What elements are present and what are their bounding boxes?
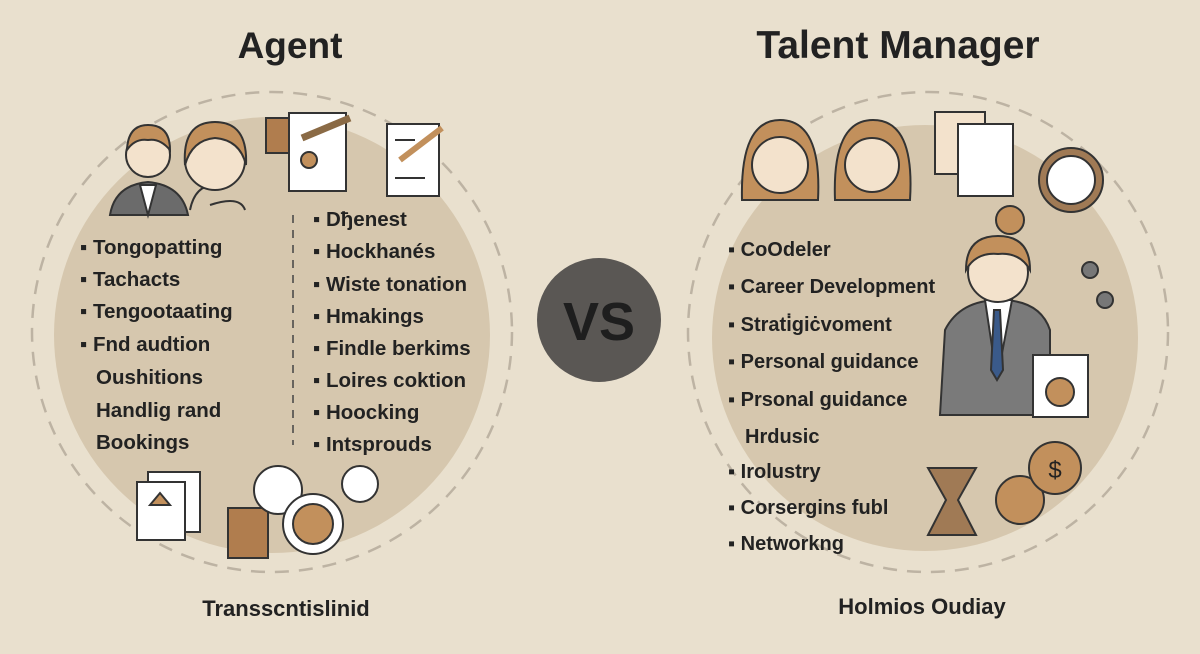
list: talent manager: ▪ Irolustry [728, 461, 822, 483]
title: Agent: Agent [238, 25, 342, 66]
list: talent manager: ▪ Strati̇giċvoment [728, 312, 892, 336]
badge: VS [537, 258, 661, 382]
list: agent right: ▪ Hockhanés [313, 240, 435, 263]
icon: document with pen [266, 113, 350, 191]
list: agent left: Bookings [96, 431, 189, 454]
list: talent manager: ▪ CoOdeler [728, 239, 831, 261]
list: agent right [313, 208, 471, 456]
list: talent manager: ▪ Networkng [728, 533, 844, 555]
list: agent right: ▪ Hmakings [313, 305, 424, 328]
list: talent manager: ▪ Personal guidance [728, 351, 918, 373]
panel: agent circle [32, 92, 512, 572]
icon: hourglass and gears: $ [1048, 457, 1062, 484]
icon: documents and clock [935, 112, 1103, 234]
list: agent left [80, 236, 233, 454]
list: agent left: ▪ Fnd audtion [80, 333, 210, 356]
list: agent right: ▪ Findle berkims [313, 337, 471, 360]
icon: agent people [110, 122, 246, 215]
panel: talent manager circle [688, 92, 1168, 572]
icon: two women [742, 120, 911, 200]
list: agent right: ▪ Wiste tonation [313, 273, 467, 296]
divider [292, 215, 294, 445]
icon: hourglass and gears [928, 442, 1081, 535]
list: agent left: ▪ Tongopatting [80, 236, 222, 259]
list: agent left: ▪ Tachacts [80, 268, 180, 291]
list: talent manager: ▪ Career Development [728, 276, 936, 298]
list: agent left: ▪ Tengootaating [80, 300, 233, 323]
icon: businessman [940, 236, 1113, 417]
list: agent right: ▪ Loires coktion [313, 369, 466, 392]
list: agent left: Oushitions [96, 366, 203, 389]
title: Talent Manager: Talent Manager [756, 24, 1040, 67]
list: talent manager: ▪ Corsergins fubl [728, 497, 888, 519]
label: talent manager bottom: Holmios Oudiay [838, 594, 1006, 619]
list: agent right: ▪ Hoocking [313, 401, 419, 424]
icon: agent bottom documents [137, 466, 378, 558]
list: agent left: Handlig rand [96, 399, 221, 422]
icon: contract [387, 124, 442, 196]
list: talent manager [728, 239, 936, 555]
list: agent right: ▪ Dђenest [313, 208, 407, 231]
list: agent right: ▪ Intsprouds [313, 433, 432, 456]
list: talent manager: Hrdusic [745, 426, 819, 448]
badge: VS: VS [563, 292, 635, 352]
label: agent bottom: Transscntislinid [202, 596, 370, 621]
list: talent manager: ▪ Prsonal guidance [728, 389, 907, 411]
